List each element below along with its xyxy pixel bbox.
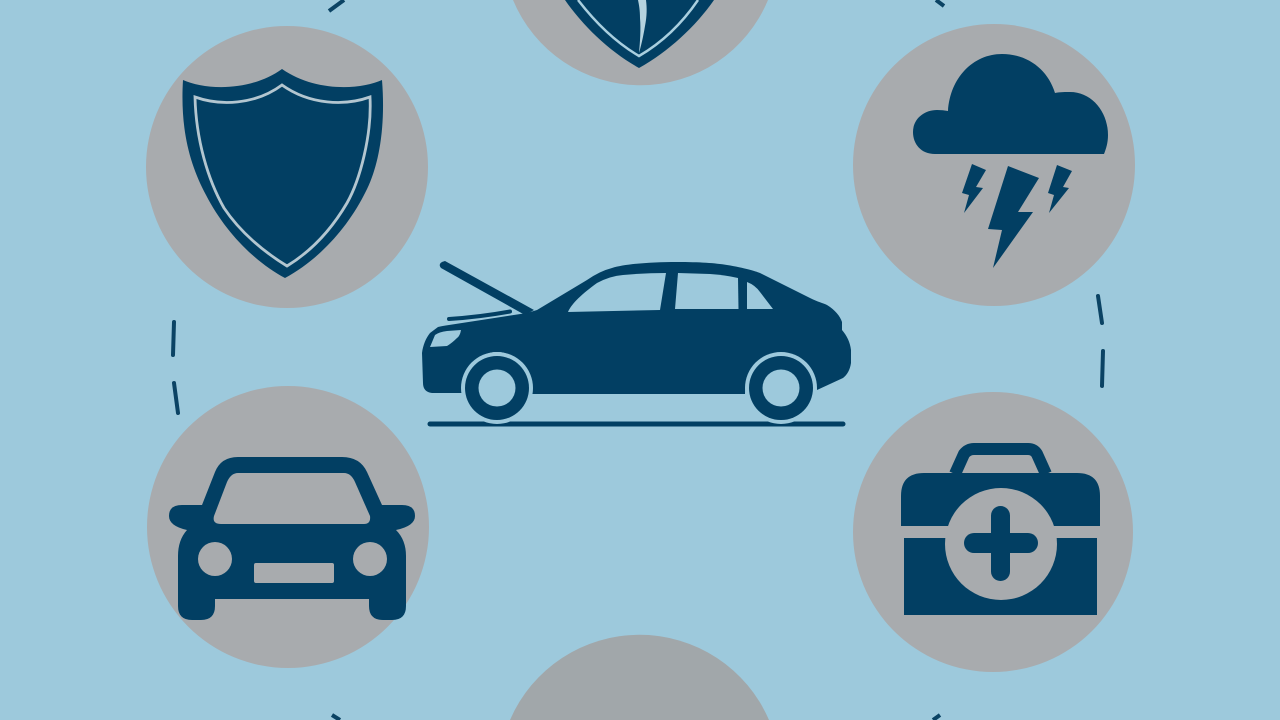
icon: car front view [169,457,415,620]
icon: shield [182,69,383,278]
panel: top centre shield badge [513,0,768,85]
headlight [430,330,461,347]
windows [568,273,666,312]
open hood [440,261,534,315]
panel: storm badge [853,24,1135,306]
icon: storm cloud [913,54,1108,268]
panel: front car badge [147,386,429,668]
icon: first aid kit [901,449,1100,615]
rear wheel [745,352,817,424]
panel: left shield badge [146,26,428,308]
front wheel [461,352,533,424]
ground line [430,422,843,426]
panel: bottom centre badge [510,635,769,720]
car body [422,262,851,394]
panel: first aid badge [853,392,1133,672]
icon: central car with open hood [422,261,851,424]
dashed connector ring [173,0,1103,720]
